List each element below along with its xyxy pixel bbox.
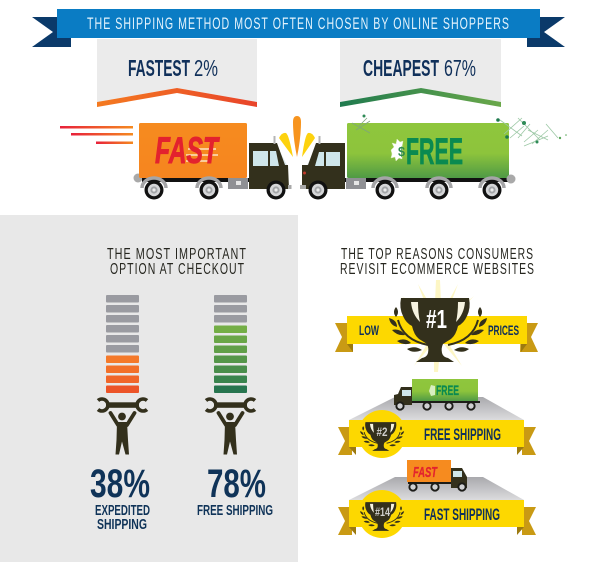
panel: cheapest 67%: 67% xyxy=(444,55,476,81)
panel: most important option at checkout xyxy=(0,215,298,562)
fast truck xyxy=(134,123,292,200)
free truck: FREE xyxy=(406,131,463,172)
small fast truck: FAST xyxy=(413,464,438,481)
stat: 38% expedited shipping: 38% xyxy=(90,462,150,506)
panel: cheapest 67% xyxy=(340,39,501,107)
stat: 78% free shipping: FREE SHIPPING xyxy=(197,503,273,519)
panel: cheapest 67%: CHEAPEST xyxy=(363,55,439,81)
icon: person lifting wrench, right xyxy=(206,399,255,454)
bar stack: free shipping xyxy=(214,295,247,393)
panel: fastest 2%: FASTEST xyxy=(128,55,190,81)
rank 14: fast shipping ribbon: FAST SHIPPING xyxy=(424,505,500,524)
stat: 38% expedited shipping: EXPEDITED xyxy=(95,503,150,519)
free truck xyxy=(300,123,516,200)
rank 2: free shipping ribbon xyxy=(338,379,536,458)
fast truck: FAST xyxy=(155,130,220,171)
heading: most important option: OPTION AT CHECKOUT xyxy=(110,261,245,278)
stat: 78% free shipping: 78% xyxy=(207,462,266,506)
small free truck xyxy=(394,379,480,411)
rank 14: fast shipping ribbon: #14 xyxy=(375,505,390,519)
rank 1: low prices ribbon and trophy: LOW xyxy=(359,322,379,338)
rank 1: low prices ribbon and trophy: PRICES xyxy=(488,322,519,338)
speed lines xyxy=(60,126,133,144)
top banner xyxy=(32,9,565,47)
panel: fastest 2%: 2% xyxy=(194,55,218,81)
rank 2: free shipping ribbon: FREE SHIPPING xyxy=(424,425,501,444)
collision burst xyxy=(279,116,315,157)
rank 2: free shipping ribbon: #2 xyxy=(376,425,388,439)
stat: 78% free shipping xyxy=(197,462,273,519)
panel: fastest 2% xyxy=(97,39,257,107)
stat: 38% expedited shipping xyxy=(90,462,150,533)
heading: top reasons xyxy=(340,246,535,278)
icon: person lifting wrench, left xyxy=(98,399,147,454)
small fast truck xyxy=(407,460,467,492)
small free truck: FREE xyxy=(436,382,459,398)
heading: most important option xyxy=(107,246,247,278)
heading: most important option: THE MOST IMPORTANT xyxy=(107,246,247,263)
rank 14: fast shipping ribbon xyxy=(338,460,536,538)
rank 1: low prices ribbon and trophy xyxy=(335,280,538,372)
free truck: $ xyxy=(398,144,406,159)
rank 1: low prices ribbon and trophy: #1 xyxy=(426,304,447,334)
stat: 38% expedited shipping: SHIPPING xyxy=(97,517,147,533)
sparkles xyxy=(352,114,567,146)
bar stack: expedited shipping xyxy=(106,295,139,393)
